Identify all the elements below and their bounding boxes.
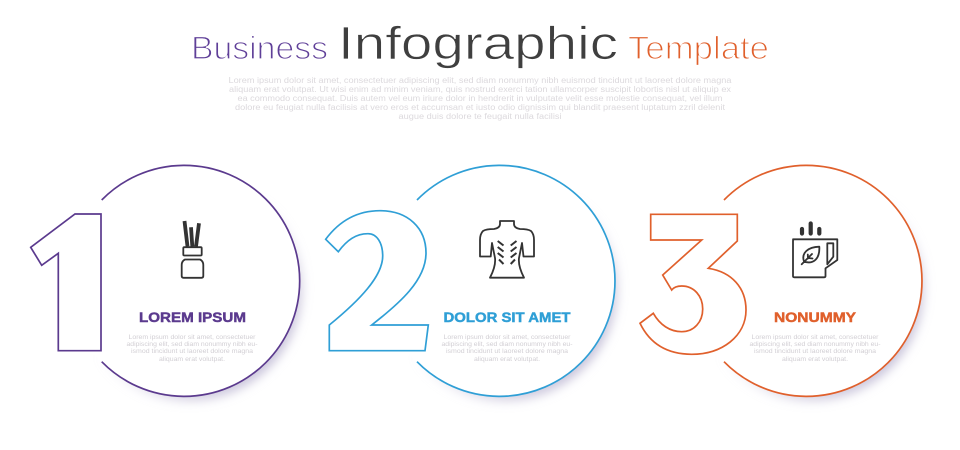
text block 1 xyxy=(126,335,258,363)
text block 2: Lorem ipsum dolor sit amet, consectetuer xyxy=(444,335,570,341)
text block 3: ismod tincidunt ut laoreet dolore magna xyxy=(754,349,877,355)
number 2 xyxy=(326,211,428,351)
intro text block xyxy=(228,76,732,121)
panel: step 2 xyxy=(326,165,618,401)
text block 2: adipiscing elit, sed diam nonummy nibh eu- xyxy=(442,342,572,348)
title: Infographic xyxy=(338,17,618,69)
intro text block: dolore eu feugiat nulla facilisis at vero eros et accumsan et iusto odio dignissim qui blandit praesent luptatum zzril delenit xyxy=(235,103,726,112)
title xyxy=(191,17,769,69)
circle outline 3 xyxy=(724,165,922,396)
circle outline 2 xyxy=(417,165,615,396)
intro text block: Lorem ipsum dolor sit amet, consectetuer adipiscing elit, sed diam nonummy nibh euismod tincidunt ut laoreet dolore magna xyxy=(228,76,732,85)
number 1 xyxy=(31,214,101,351)
heading: dolor sit amet: DOLOR SIT AMET xyxy=(444,310,571,325)
circle outline 1 xyxy=(102,165,300,396)
text block 3: aliquam erat volutpat. xyxy=(782,357,848,363)
panel: step 1 xyxy=(31,165,302,401)
icon: reed diffuser xyxy=(182,221,203,278)
text block 1: adipiscing elit, sed diam nonummy nibh eu- xyxy=(126,342,258,348)
text block 3: adipiscing elit, sed diam nonummy nibh eu- xyxy=(750,342,880,348)
number 3 xyxy=(640,214,746,354)
heading: nonummy: NONUMMY xyxy=(774,310,856,325)
icon: mug of herbal tea xyxy=(793,224,837,277)
text block 2: ismod tincidunt ut laoreet dolore magna xyxy=(446,349,569,355)
title: Template xyxy=(628,30,769,66)
text block 2: aliquam erat volutpat. xyxy=(474,357,540,363)
text block 2 xyxy=(442,335,572,363)
text block 1: aliquam erat volutpat. xyxy=(159,357,225,363)
intro text block: aliquam erat volutpat. Ut wisi enim ad minim veniam, quis nostrud exerci tation ullamcorper suscipit lobortis nisl ut aliquip ex xyxy=(229,85,731,94)
icon: human back xyxy=(480,221,534,278)
intro text block: ea commodo consequat. Duis autem vel eum iriure dolor in hendrerit in vulputate velit esse molestie consequat, vel illum xyxy=(238,94,723,103)
panel: step 3 xyxy=(640,165,924,401)
heading: lorem ipsum: LOREM IPSUM xyxy=(139,310,246,325)
text block 3 xyxy=(750,335,880,363)
text block 1: ismod tincidunt ut laoreet dolore magna xyxy=(131,349,254,355)
text block 3: Lorem ipsum dolor sit amet, consectetuer xyxy=(752,335,878,341)
title: Business xyxy=(191,30,328,66)
text block 1: Lorem ipsum dolor sit amet, consectetuer xyxy=(128,335,256,341)
intro text block: augue duis dolore te feugait nulla facilisi xyxy=(398,112,562,121)
